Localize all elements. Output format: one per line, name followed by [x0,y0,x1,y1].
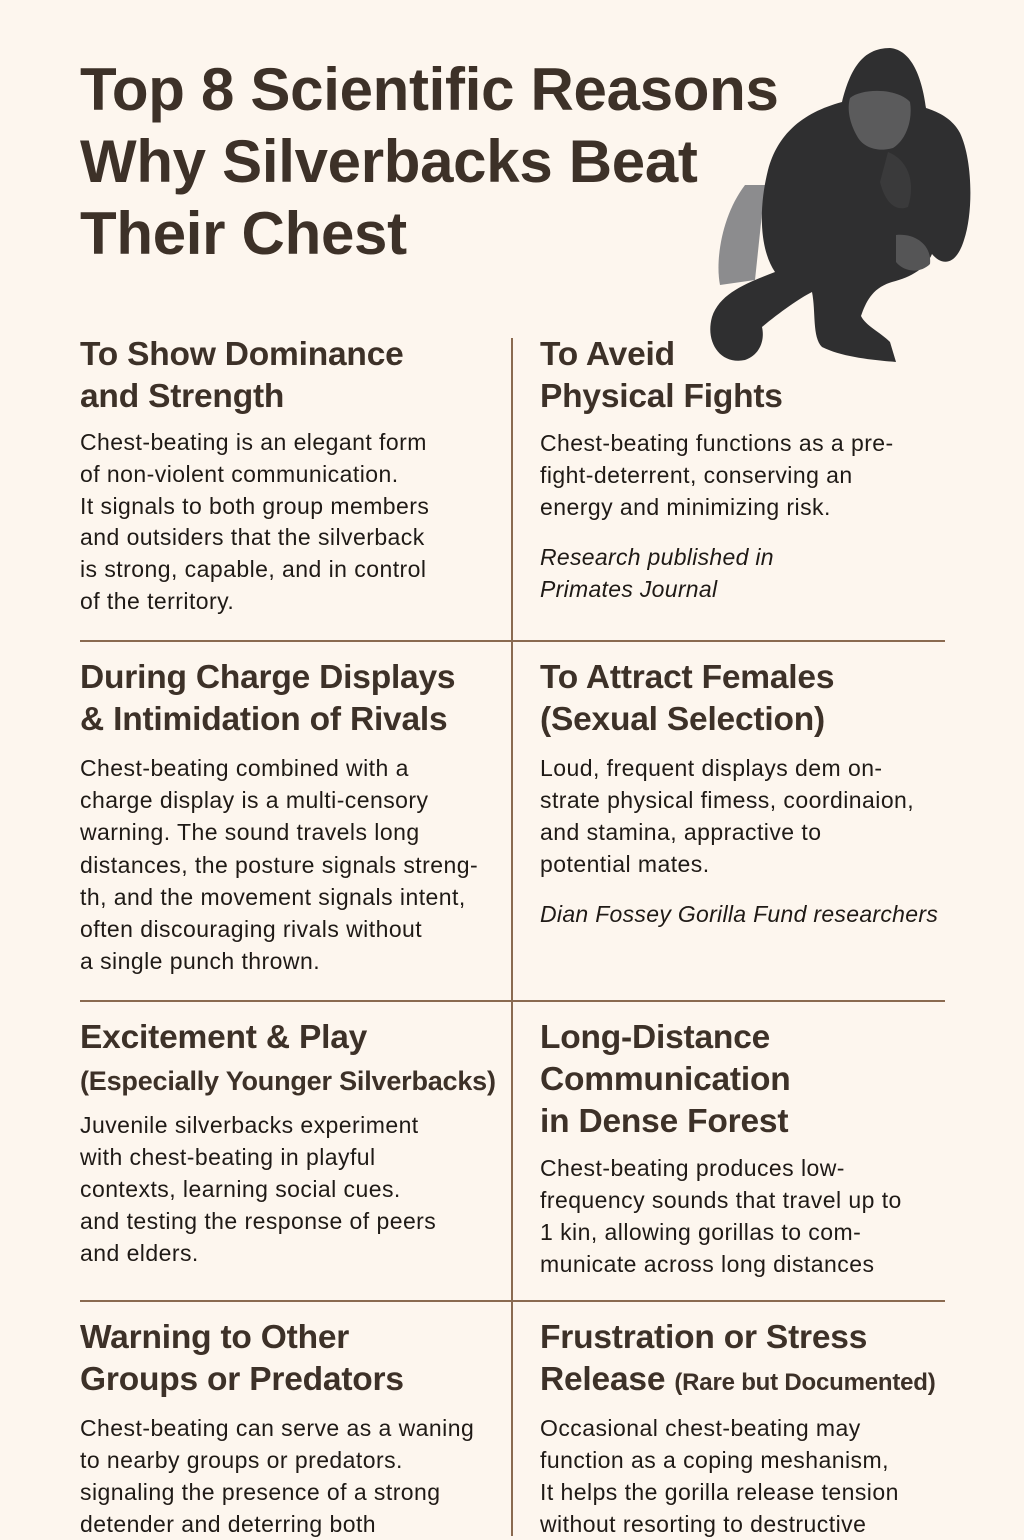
body 7 [80,1415,474,1537]
panel 5 [80,1019,496,1266]
heading 5: Excitement & Play [80,1019,367,1056]
panel 4 [540,659,938,927]
heading 5: (Especially Younger Silverbacks) [80,1066,496,1096]
heading 2: Physical Fights [540,378,783,415]
panel 7 [80,1319,474,1537]
body 5: and testing the response of peers [80,1208,436,1234]
body 1: and outsiders that the silverback [80,524,425,550]
body 3: distances, the posture signals streng- [80,852,478,878]
body 4: and stamina, appractive to [540,819,821,845]
heading 1 [80,336,404,415]
body 7: to nearby groups or predators. [80,1447,403,1473]
panel 1 [80,336,429,614]
body 8: Occasional chest-beating may [540,1415,861,1441]
panel 8 [540,1319,936,1537]
heading 6: Communication [540,1061,791,1098]
body 5: Juvenile silverbacks experiment [80,1112,419,1138]
body 8 [540,1415,899,1537]
body 6 [540,1155,902,1277]
heading 4 [540,659,834,738]
heading 5 [80,1019,496,1096]
heading 7: Groups or Predators [80,1361,404,1398]
body 6: frequency sounds that travel up to [540,1187,902,1213]
heading 3: & Intimidation of Rivals [80,701,447,738]
body 1: It signals to both group members [80,493,429,519]
heading 6: in Dense Forest [540,1103,788,1140]
body 2: Chest-beating functions as a pre- [540,430,894,456]
body 7: signaling the presence of a strong [80,1479,441,1505]
title: Top 8 Scientific Reasons [80,56,779,123]
body 6: 1 kin, allowing gorillas to com- [540,1219,861,1245]
body 1: of the territory. [80,588,234,614]
body 5: and elders. [80,1240,199,1266]
body 3: th, and the movement signals intent, [80,884,466,910]
body 7: detender and deterring both [80,1511,376,1537]
title [80,56,779,267]
body 3: often discouraging rivals without [80,916,422,942]
body 4 [540,755,914,877]
citation 4: Dian Fossey Gorilla Fund researchers [540,901,938,927]
heading 1: To Show Dominance [80,336,404,373]
illustration: gorilla [710,48,970,362]
body 1: is strong, capable, and in control [80,556,426,582]
body 2 [540,430,894,520]
heading 4: To Attract Females [540,659,834,696]
body 1 [80,429,429,614]
panel 6 [540,1019,902,1277]
body 3: warning. The sound travels long [80,819,420,845]
heading 2: To Aveid [540,336,675,373]
heading 7: Warning to Other [80,1319,349,1356]
heading 3: During Charge Displays [80,659,455,696]
body 4: Loud, frequent displays dem on- [540,755,883,781]
body 8: without resorting to destructive [540,1511,866,1537]
heading 8: Release (Rare but Documented) [540,1361,936,1398]
body 8: It helps the gorilla release tension [540,1479,899,1505]
heading 6: Long-Distance [540,1019,770,1056]
body 1: of non-violent communication. [80,461,399,487]
heading 7 [80,1319,404,1398]
heading 3 [80,659,455,738]
title: Why Silverbacks Beat [80,128,698,195]
body 5 [80,1112,436,1266]
body 1: Chest-beating is an elegant form [80,429,427,455]
heading 2 [540,336,783,415]
panel 3 [80,659,478,974]
title: Their Chest [80,200,407,267]
heading 4: (Sexual Selection) [540,701,825,738]
citation 2 [540,544,774,602]
heading 8 [540,1319,936,1398]
heading 6 [540,1019,791,1140]
citation 2: Primates Journal [540,576,717,602]
citation 2: Research published in [540,544,774,570]
body 6: Chest-beating produces low- [540,1155,845,1181]
body 2: fight-deterrent, conserving an [540,462,853,488]
heading 8: Frustration or Stress [540,1319,867,1356]
body 2: energy and minimizing risk. [540,494,831,520]
body 4: strate physical fimess, coordinaion, [540,787,914,813]
body 5: with chest-beating in playful [80,1144,376,1170]
panel 2 [540,336,894,602]
body 3: Chest-beating combined with a [80,755,409,781]
heading 1: and Strength [80,378,284,415]
body 7: Chest-beating can serve as a waning [80,1415,474,1441]
body 3 [80,755,478,974]
body 6: municate across long distances [540,1251,874,1277]
body 3: charge display is a multi-censory [80,787,428,813]
body 3: a single punch thrown. [80,948,320,974]
body 5: contexts, learning social cues. [80,1176,401,1202]
body 8: function as a coping meshanism, [540,1447,889,1473]
body 4: potential mates. [540,851,710,877]
